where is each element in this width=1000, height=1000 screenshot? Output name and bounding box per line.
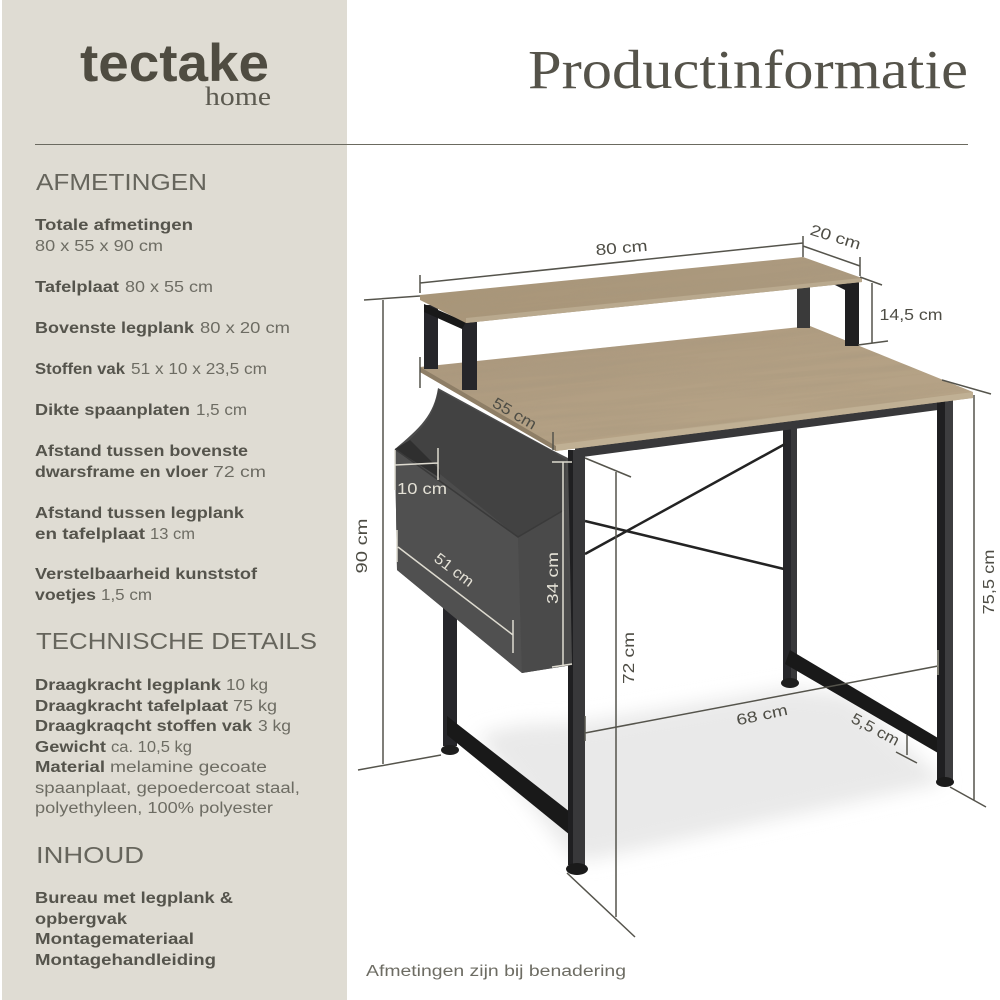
top shelf [420,257,862,323]
dimension labels [354,222,998,750]
back right leg and foot [781,428,799,688]
contents list: Montagehandleiding [35,952,216,969]
label: 68 cm: 68 cm [735,702,789,729]
left sidebar panel [2,0,347,1000]
heading: inhoud: INHOUD [36,842,144,868]
spec: dikte spaanplaten: 1,5 cm [196,402,247,419]
spec: verstelbaarheid [35,566,258,604]
heading: afmetingen: AFMETINGEN [36,169,207,195]
shelf front legs [424,304,477,390]
front left leg and foot [566,450,588,875]
details list: Draagkraqcht stoffen vak [35,718,252,735]
logo: tectake [80,34,269,93]
details list: Gewicht [35,739,106,756]
details list: ca. 10,5 kg [111,739,192,756]
label: 14,5 cm: 14,5 cm [880,307,942,324]
title: Productinformatie [528,39,968,100]
contents list: opbergvak [35,911,127,928]
details list: spaanplaat, gepoedercoat staal, [35,780,300,797]
details list [35,677,300,817]
details list: Material [35,759,105,776]
bag dimension lines [395,448,572,667]
spec: afstand legplank [35,505,244,543]
contents list [35,890,233,969]
label: 75,5 cm: 75,5 cm [981,550,998,614]
dimension lines [358,236,991,937]
spec: dikte spaanplaten: Dikte spaanplaten [35,402,190,419]
label: 51 cm: 51 cm [431,550,477,591]
spec: dikte spaanplaten [35,402,247,419]
spec: afstand legplank: 13 cm [150,526,195,543]
floor shadow [478,688,945,860]
spec: verstelbaarheid: 1,5 cm [101,587,152,604]
contents list: Bureau met legplank & [35,890,233,907]
spec: afstand legplank: en tafelplaat [35,526,145,543]
contents list: Montagemateriaal [35,931,194,948]
fabric storage bag [395,388,572,673]
spec: tafelplaat: 80 x 55 cm [125,279,213,296]
cross braces [585,444,785,569]
spec: totale afmetingen [35,217,193,255]
spec: stoffen vak [35,361,267,378]
section: technische details [35,628,317,817]
spec: afstand dwarsframe [35,443,266,481]
spec: bovenste legplank: 80 x 20 cm [200,320,290,337]
label: 34 cm: 34 cm [545,552,562,604]
details list: polyethyleen, 100% polyester [35,800,273,817]
spec: totale afmetingen: 80 x 55 x 90 cm [35,238,163,255]
label: 80 cm: 80 cm [595,238,648,259]
spec: bovenste legplank: Bovenste legplank [35,320,194,337]
desk top [420,326,973,451]
footnote: Afmetingen zijn bij benadering [366,963,626,980]
spec: tafelplaat: Tafelplaat [35,279,119,296]
heading: technische details: TECHNISCHE DETAILS [36,628,317,654]
shelf back legs [797,282,859,346]
details list: Draagkracht tafelplaat [35,698,228,715]
spec: tafelplaat [35,279,213,296]
label: 20 cm: 20 cm [808,222,863,253]
spec: stoffen vak: Stoffen vak [35,361,125,378]
under-top frame bar [575,398,953,458]
details list: melamine gecoate [110,759,267,776]
spec: afstand dwarsframe: 72 cm [213,464,266,481]
label: 10 cm: 10 cm [397,481,447,498]
spec: verstelbaarheid: Verstelbaarheid kunststof [35,566,258,583]
back left leg and foot [441,600,459,755]
label: 72 cm: 72 cm [621,632,638,684]
left floor bar [447,716,570,835]
right floor bar [785,650,938,753]
spec: afstand dwarsframe: Afstand tussen bovenste [35,443,248,460]
spec: stoffen vak: 51 x 10 x 23,5 cm [131,361,267,378]
label: 55 cm: 55 cm [489,395,539,433]
spec: bovenste legplank [35,320,290,337]
details list: 75 kg [233,698,277,715]
spec: afstand legplank: Afstand tussen legplank [35,505,244,522]
spec: totale afmetingen: Totale afmetingen [35,217,193,234]
desk illustration [394,257,973,875]
section: inhoud [35,842,233,969]
spec: verstelbaarheid: voetjes [35,587,96,604]
spec: afstand dwarsframe: dwarsframe en vloer [35,464,208,481]
details list: 10 kg [226,677,268,694]
section: afmetingen [35,169,290,604]
details list: 3 kg [258,718,291,735]
label: 5,5 cm: 5,5 cm [848,710,902,750]
front right leg and foot [936,400,954,787]
details list: Draagkracht legplank [35,677,221,694]
logo: home [205,82,271,111]
label: 90 cm: 90 cm [354,519,371,573]
